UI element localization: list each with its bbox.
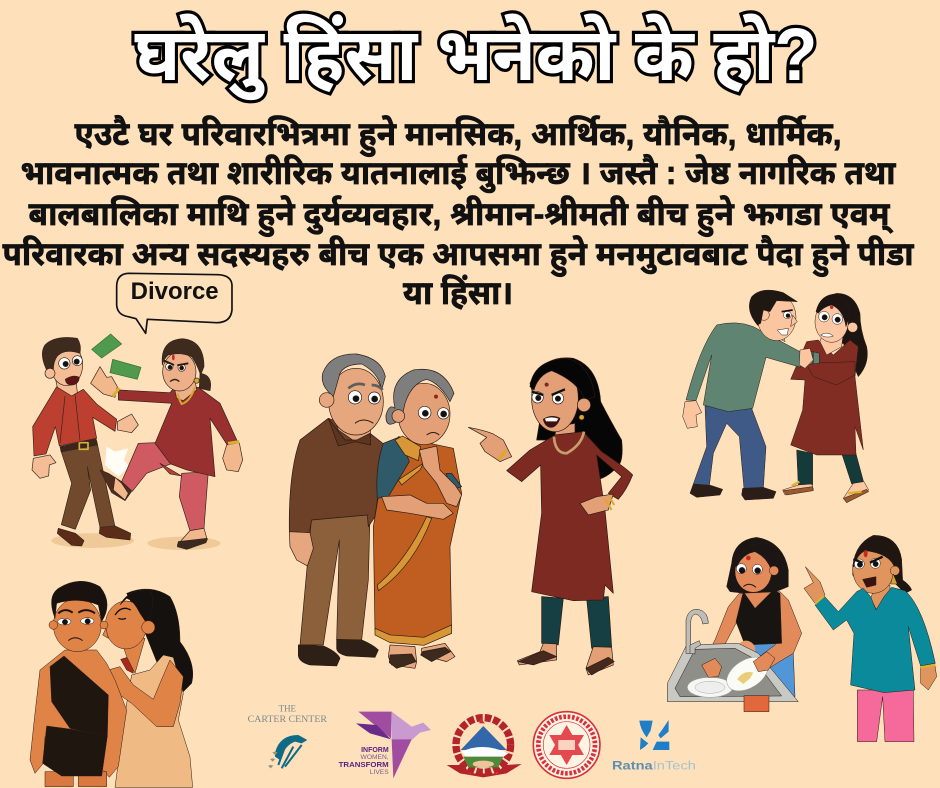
illustration: daughter-in-law scolding elderly couple (289, 354, 633, 675)
intro paragraph: परिवारका अन्य सदस्यहरु बीच एक आपसमा हुने मनमुटावबाट पैदा हुने पीडा (2, 234, 915, 277)
intro paragraph: एउटै घर परिवारभित्रमा हुने मानसिक, आर्थिक, यौनिक, धार्मिक, (74, 114, 842, 157)
logo: Inform Women Transform Lives: WOMEN, (361, 754, 389, 761)
title: घरेलु हिंसा भनेको के हो? (134, 13, 818, 100)
ground shadows (51, 533, 221, 550)
intro paragraph (2, 114, 915, 311)
speech bubble: Divorce (117, 273, 232, 333)
impact burst (105, 447, 129, 477)
woman being grabbed (783, 293, 869, 503)
illustration: unwanted kiss on a man's cheek (30, 581, 193, 787)
sink, tap and dishes (667, 609, 798, 712)
intro paragraph: बालबालिका माथि हुने दुर्यव्यवहार, श्रीमान-श्रीमती बीच हुने झगडा एवम् (28, 194, 893, 237)
logo: Kathmandu Metropolitan City (533, 712, 600, 778)
flying money (92, 334, 141, 379)
illustration: husband grabbing wife's neck (683, 290, 869, 503)
elderly woman in sari (373, 369, 462, 668)
illustration: woman kicking man, asking for divorce (32, 273, 243, 550)
elderly man (289, 354, 385, 666)
logo: Inform Women Transform Lives: INFORM (361, 747, 389, 754)
logo: Inform Women Transform Lives: LIVES (370, 769, 389, 776)
woman (103, 589, 193, 787)
speech bubble: Divorce: Divorce (131, 278, 219, 305)
logo: RatnaInTech (612, 720, 696, 772)
scolding woman (468, 358, 633, 675)
man (32, 337, 138, 546)
logo: Inform Women Transform Lives (339, 712, 431, 778)
washing woman (702, 537, 802, 697)
intro paragraph: भावनात्मक तथा शारीरिक यातनालाई बुझिन्छ । जस्तै : जेष्ठ नागरिक तथा (20, 153, 897, 194)
logo: The Carter Center (248, 704, 327, 768)
logo: The Carter Center: CARTER CENTER (248, 714, 327, 724)
partner logos row (248, 704, 696, 778)
intro paragraph: या हिंसा। (403, 274, 513, 311)
scolding woman in teal kurta (804, 535, 937, 742)
logo: Inform Women Transform Lives: TRANSFORM (339, 762, 389, 769)
illustration: woman forced to wash dishes while being scolded (667, 535, 937, 742)
logo: The Carter Center: THE (279, 704, 297, 714)
woman (91, 339, 243, 549)
man (30, 581, 127, 787)
man in green sweater (683, 290, 819, 500)
logo: RatnaInTech: RatnaInTech (612, 758, 696, 772)
logo: Government of Nepal emblem (447, 717, 522, 777)
